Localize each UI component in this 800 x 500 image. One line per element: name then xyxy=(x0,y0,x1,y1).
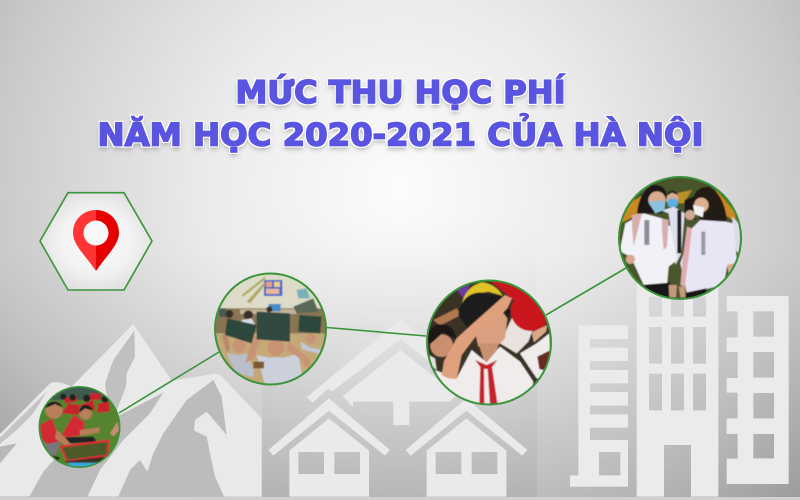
large house xyxy=(307,319,460,425)
photo: classroom pupils with slates xyxy=(213,272,327,390)
title xyxy=(98,72,704,154)
title: NĂM HỌC 2020-2021 CỦA HÀ NỘI xyxy=(98,112,704,154)
right building xyxy=(727,296,789,484)
photo: kindergarten children xyxy=(37,385,123,468)
mountains illustration xyxy=(0,324,262,497)
buildings illustration xyxy=(570,283,789,497)
connector lines xyxy=(119,268,626,413)
title: MỨC THU HỌC PHÍ xyxy=(236,72,566,111)
houses illustration xyxy=(268,319,527,497)
photo: pupil saluting xyxy=(425,278,553,407)
right small house xyxy=(406,398,527,497)
photo: students in masks xyxy=(617,175,742,300)
left building xyxy=(570,325,628,487)
left small house xyxy=(268,398,390,497)
middle building xyxy=(637,283,718,497)
icon: location pin in hexagon xyxy=(40,193,152,290)
